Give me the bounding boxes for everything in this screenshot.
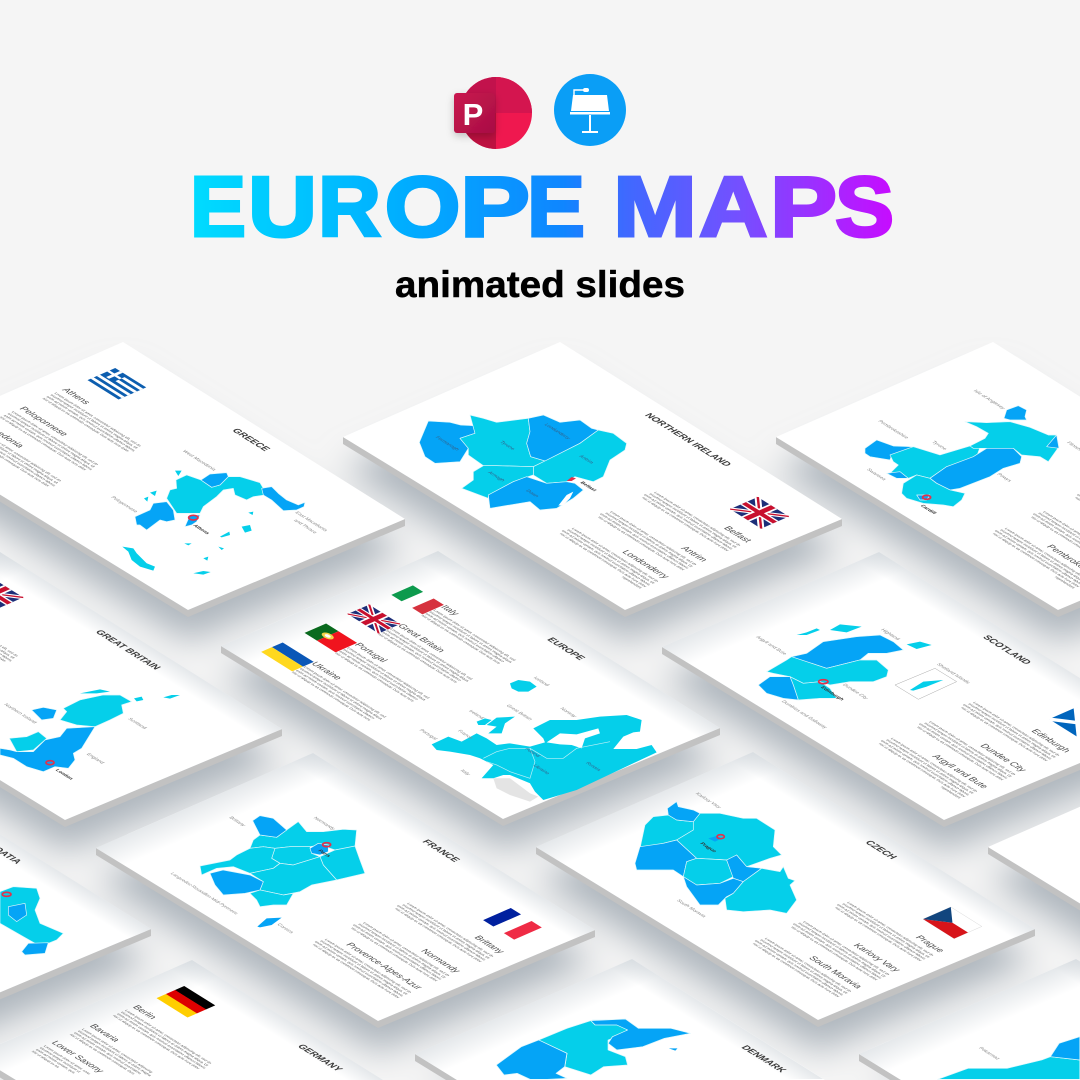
- Greece text content: enim ad minim veniam, quis nostrud exercitation ullamco laboris: [2, 414, 94, 471]
- Northern Ireland text content: enim ad minim veniam, quis nostrud exercitation ullamco laboris: [643, 494, 734, 550]
- Scotland text content: Argyll and Bute: [930, 753, 991, 790]
- Scotland map labels: Highland: [879, 628, 901, 641]
- Europe map labels: Great Britain: [504, 704, 534, 721]
- Greece map labels: Peloponnese: [109, 496, 139, 514]
- France text content: eiusmod tempor incididunt ut labore et dolore magna aliqua. Ut: [401, 904, 491, 959]
- Northern Ireland text content: eiusmod tempor incididunt ut labore et dolore magna aliqua. Ut: [604, 512, 694, 568]
- Europe text content: Italy: [439, 604, 462, 617]
- Scotland map labels: Edinburgh: [819, 686, 845, 701]
- slide shadows: [0, 374, 1080, 1080]
- France text content: eiusmod tempor incididunt ut labore et dolore magna aliqua. Ut: [357, 923, 447, 979]
- Greece text content: enim ad minim veniam, quis nostrud exercitation ullamco laboris: [45, 396, 136, 452]
- France text content: Normandy: [419, 948, 463, 974]
- Europe text content: enim ad minim veniam, quis nostrud exercitation ullamco: [424, 613, 505, 663]
- Northern Ireland map labels: Antrim: [577, 455, 595, 465]
- Northern Ireland text content: enim ad minim veniam, quis nostrud exercitation ullamco laboris: [599, 513, 690, 569]
- Denmark slide upper-right edge tint: [610, 959, 823, 1079]
- Germany text content: nisi ut aliquip ex ea commodo consequat. Duis aute irure dolor: [112, 1015, 201, 1070]
- Scotland text content: nisi ut aliquip ex ea commodo consequat. Duis aute irure dolor: [960, 707, 1049, 762]
- Europe text content: enim ad minim veniam, quis nostrud exercitation ullamco: [381, 631, 462, 682]
- Denmark slide upper-left edge tint: [415, 959, 660, 1072]
- Czech text content: eiusmod tempor incididunt ut labore et dolore magna aliqua. Ut: [759, 939, 848, 994]
- Germany text content: Bavaria: [87, 1023, 123, 1044]
- Europe text content: Lorem ipsum dolor sit amet, consectetur adipiscing elit, sed: [432, 609, 517, 661]
- Germany text content: Lorem ipsum dolor sit amet, consectetur adipiscing: [81, 1028, 154, 1073]
- Great Britain map labels: England: [84, 753, 106, 765]
- Northern Ireland map labels: Belfast: [578, 481, 598, 492]
- France text content: eiusmod tempor incididunt ut labore et dolore magna aliqua. Ut: [319, 940, 408, 995]
- Czech text content: nisi ut aliquip ex ea commodo consequat. Duis aute irure dolor: [834, 907, 923, 962]
- Northern Ireland text content: [478, 412, 814, 590]
- Germany text content: eiusmod tempor incididunt ut: [38, 1047, 82, 1073]
- title: P: [460, 160, 530, 255]
- Germany text content: eiusmod tempor incididunt ut labore et dolore magna: [77, 1030, 153, 1077]
- Greece map labels: East Macedonia: [293, 511, 329, 532]
- Scotland map labels: Dundee City: [841, 683, 870, 700]
- icon: PowerPoint logo: P: [463, 97, 483, 132]
- Europe map labels: [417, 676, 602, 776]
- map: Great Britain: [0, 689, 180, 772]
- Wales text content: nisi ut aliquip ex ea commodo consequat. Duis aute irure dolor: [992, 533, 1080, 588]
- France text content: enim ad minim veniam, quis nostrud exercitation ullamco laboris: [352, 924, 443, 980]
- Great Britain slide edge tint: [0, 552, 282, 824]
- Wales map labels: Isle of Anglesey: [971, 389, 1007, 410]
- France text content: Lorem ipsum dolor sit amet, consectetur adipiscing elit, sed do: [406, 902, 495, 958]
- Greece text content: Peloponnese: [17, 405, 71, 437]
- Germany text content: Lorem ipsum dolor sit amet, consectetur adipiscing elit, sed do: [124, 1009, 213, 1064]
- Greece map labels: and Thrace: [292, 519, 318, 535]
- Germany text content: nisi ut aliquip ex ea: [30, 1050, 61, 1069]
- Northern Ireland text content: Lorem ipsum dolor sit amet, consectetur adipiscing elit, sed do: [609, 511, 698, 566]
- Europe map labels: Poland: [523, 747, 541, 758]
- Northern Ireland map labels: [433, 423, 598, 498]
- France map labels: Brittany: [227, 816, 247, 828]
- France text content: Provence-Alpes-Azur: [344, 941, 425, 991]
- France map labels: Corsica: [275, 923, 295, 934]
- panel: Greece slide: [0, 342, 405, 617]
- France text content: Lorem ipsum dolor sit amet, consectetur adipiscing elit, sed do: [362, 922, 451, 977]
- Germany slide upper-right edge tint: [170, 960, 383, 1080]
- icon: Keynote logo: [554, 74, 626, 146]
- Northern Ireland text content: reprehenderit.: [621, 576, 643, 590]
- map: Denmark: [496, 1019, 691, 1079]
- Europe map labels: Italy: [458, 769, 472, 776]
- Northern Ireland text content: nisi ut aliquip ex ea commodo consequat. Duis aute irure dolor: [597, 516, 686, 571]
- France slide edge tint: [96, 753, 595, 1025]
- Europe text content: eiusmod tempor incididunt ut labore et dolore magna aliqua: [385, 630, 471, 683]
- Northern Ireland text content: Antrim: [679, 545, 710, 563]
- Wales map labels: Swansea: [864, 468, 888, 481]
- Europe text content: Lorem ipsum dolor sit amet, consectetur adipiscing elit, sed: [389, 628, 474, 680]
- Greece text content: Lorem ipsum dolor sit amet, consectetur adipiscing elit, sed do: [53, 392, 142, 447]
- Scotland map labels: Dumfries and Galloway: [779, 700, 829, 730]
- Germany slide upper-left edge tint: [0, 960, 220, 1073]
- bottom right slide upper-left edge tint: [859, 959, 1080, 1072]
- Great Britain map labels: Northern Ireland: [2, 703, 38, 724]
- Greece text content: nisi ut aliquip ex ea commodo consequat. Duis aute irure dolor: [41, 397, 131, 453]
- panel: Scotland slide: [662, 552, 1080, 827]
- panel: blank partial slide far right: [988, 752, 1080, 1027]
- icon: PowerPoint logo: [454, 77, 532, 149]
- map: Scotland: [758, 624, 957, 700]
- France text content: nisi ut aliquip ex ea commodo consequat. Duis aute irure dolor: [350, 927, 439, 982]
- Europe text content: nisi ut aliquip ex ea commodo consequat. Duis aute irure: [291, 671, 372, 721]
- Northern Ireland map labels: Down: [524, 489, 540, 498]
- Great Britain map labels: London: [53, 769, 74, 781]
- Europe text content: Lorem ipsum dolor sit amet, consectetur adipiscing elit, sed: [346, 647, 431, 699]
- Great Britain text content: [0, 570, 163, 706]
- Czech text content: Karlovy Vary: [851, 942, 903, 973]
- Northern Ireland text content: Lorem ipsum dolor sit amet, consectetur adipiscing elit, sed do: [571, 527, 659, 583]
- Wales map labels: Pembrokeshire: [876, 419, 910, 440]
- panel: Germany slide: [0, 960, 383, 1080]
- Czech text content: Lorem ipsum dolor sit amet, consectetur adipiscing elit, sed do: [764, 937, 852, 993]
- Scotland text content: nisi ut aliquip ex ea commodo consequat. Duis aute irure dolor: [878, 743, 967, 798]
- Europe text content: nisi ut aliquip ex ea commodo consequat. Duis aute irure: [334, 652, 415, 702]
- Europe map labels: Ireland: [467, 709, 485, 720]
- bottom right slide upper-right edge tint: [1054, 959, 1080, 1079]
- Scotland text content: SCOTLAND: [981, 634, 1034, 666]
- Scotland text content: eiusmod tempor incididunt ut labore et dolore magna aliqua. Ut: [923, 722, 1013, 778]
- title: U: [248, 160, 317, 255]
- title: A: [699, 160, 768, 255]
- Greece text content: Lorem ipsum dolor sit amet, consectetur adipiscing elit, sed do: [10, 411, 99, 466]
- title: E: [527, 160, 585, 255]
- map: Northern Ireland: [419, 415, 627, 510]
- title: S: [835, 160, 894, 255]
- Czech text content: Lorem ipsum dolor sit amet, consectetur adipiscing elit, sed do: [846, 901, 935, 957]
- Czech text content: [702, 839, 1007, 998]
- Europe map labels: Russia: [584, 761, 602, 772]
- Greece text content: nisi ut aliquip ex ea commodo consequat. Duis aute irure dolor: [0, 416, 88, 471]
- map: Croatia: [0, 887, 63, 955]
- title: M: [613, 160, 697, 255]
- Northern Ireland text content: Londonderry: [620, 549, 672, 580]
- Greece map labels: [109, 450, 329, 535]
- Europe text content: enim ad minim veniam, quis nostrud exercitation ullamco: [295, 669, 376, 720]
- Czech map labels: Prague: [698, 842, 718, 853]
- Germany text content: enim ad minim veniam, quis nostrud exercitation ullamco laboris: [116, 1013, 207, 1069]
- Wales text content: [938, 429, 1080, 590]
- Germany text content: Lorem ipsum dolor sit amet, cons: [42, 1045, 92, 1075]
- panel: France slide: [96, 753, 595, 1028]
- Great Britain map labels: Scotland: [126, 717, 148, 730]
- France text content: Lorem ipsum dolor sit amet, consectetur adipiscing elit, sed do: [324, 938, 412, 994]
- Scotland text content: Dundee City: [978, 743, 1029, 773]
- Germany text content: GERMANY: [295, 1043, 345, 1073]
- Northern Ireland text content: enim ad minim veniam, quis nostrud exercitation ullamco laboris: [560, 530, 652, 586]
- France text content: enim ad minim veniam, quis nostrud exercitation ullamco laboris: [396, 905, 487, 961]
- Greece text content: eiusmod tempor incididunt ut labore et dolore magna aliqua. Ut: [49, 394, 139, 449]
- map: bottom right slide: [938, 1037, 1080, 1079]
- Europe text content: Lorem ipsum dolor sit amet, consectetur adipiscing elit, sed: [303, 666, 387, 718]
- Northern Ireland text content: eiusmod tempor incididunt ut labore et dolore magna aliqua. Ut: [566, 529, 655, 584]
- panel: Denmark slide: [415, 959, 825, 1080]
- Europe text content: nisi ut aliquip ex ea commodo consequat. Duis aute irure: [377, 633, 458, 683]
- title: R: [318, 160, 381, 255]
- Europe text content: Great Britain: [396, 623, 447, 653]
- Czech text content: South Moravia: [807, 955, 866, 990]
- panel: Wales slide: [776, 342, 1080, 617]
- France map labels: Languedoc-Roussillon-Midi-Pyrenees: [169, 872, 240, 915]
- Czech map labels: South Moravia: [675, 899, 707, 918]
- France text content: nisi ut aliquip ex ea commodo consequat. Duis aute irure dolor: [312, 944, 401, 999]
- subtitle: animated slides: [395, 264, 685, 305]
- Scotland map labels: Shetland Islands: [935, 663, 972, 685]
- Czech map labels: [675, 792, 723, 918]
- Scotland map labels: [754, 628, 972, 730]
- Germany text content: nisi ut aliquip ex ea commodo consequat. Duis: [69, 1033, 136, 1075]
- France text content: FRANCE: [420, 838, 462, 863]
- Czech text content: enim ad minim veniam, quis nostrud exercitation ullamco laboris: [792, 923, 883, 979]
- Scotland text content: Lorem ipsum dolor sit amet, consectetur adipiscing elit, sed do: [972, 701, 1061, 757]
- Northern Ireland text content: nisi ut aliquip ex ea commodo consequat. Duis aute irure dolor: [641, 497, 730, 552]
- Croatia slide edge tint: [0, 752, 151, 938]
- panel: Czech slide: [536, 752, 1035, 1027]
- Scotland text content: enim ad minim veniam, quis nostrud exercitation ullamco laboris: [918, 723, 1009, 779]
- Wales text content: reprehenderit.: [1054, 576, 1076, 590]
- Northern Ireland text content: NORTHERN IRELAND: [642, 412, 734, 468]
- map: Greece: [122, 471, 305, 575]
- Czech map labels: Karlovy Vary: [693, 792, 723, 809]
- Scotland slide edge tint: [662, 552, 1080, 824]
- Europe text content: [259, 570, 587, 740]
- Wales map labels: Powys: [995, 472, 1013, 483]
- Europe text content: eiusmod tempor incididunt ut labore et dolore magna aliqua: [342, 649, 428, 702]
- Northern Ireland map labels: Armagh: [486, 471, 506, 483]
- France text content: enim ad minim veniam, quis nostrud exercitation ullamco laboris: [313, 941, 405, 997]
- Scotland text content: Lorem ipsum dolor sit amet, consectetur adipiscing elit, sed do: [890, 737, 978, 793]
- Europe text content: Ukraine: [309, 661, 344, 681]
- Germany text content: Lower Saxony: [49, 1040, 107, 1074]
- Denmark title: DENMARK: [739, 1044, 789, 1074]
- Great Britain text content: GREAT BRITAIN: [93, 629, 163, 671]
- title: O: [385, 160, 461, 255]
- Greece map labels: West Macedonia: [180, 450, 218, 472]
- panel: partial slide bottom right: [859, 959, 1080, 1080]
- Scotland text content: Lorem ipsum dolor sit amet, consectetur adipiscing elit, sed do: [928, 721, 1017, 776]
- Scotland map labels: Argyll and Bute: [754, 635, 788, 656]
- France map labels: Paris: [316, 849, 332, 858]
- panel: Europe slide: [221, 551, 720, 826]
- Europe map labels: Iceland: [531, 676, 551, 687]
- map: Europe: [432, 680, 657, 802]
- Europe map labels: Ukraine: [531, 764, 551, 775]
- Scotland text content: enim ad minim veniam, quis nostrud exercitation ullamco laboris: [879, 740, 971, 796]
- Wales map labels: Cardiff: [918, 504, 938, 515]
- Czech text content: nisi ut aliquip ex ea commodo consequat. Duis aute irure dolor: [790, 926, 879, 981]
- Great Britain map labels: [2, 703, 148, 781]
- Greece text content: GREECE: [230, 427, 272, 452]
- panel: Northern Ireland slide: [343, 342, 842, 617]
- France map labels: Normandy: [311, 816, 337, 831]
- Czech text content: eiusmod tempor incididunt ut labore et dolore magna aliqua. Ut: [841, 903, 931, 958]
- Scotland text content: enim ad minim veniam, quis nostrud exercitation ullamco laboris: [962, 704, 1053, 760]
- Europe text content: eiusmod tempor incididunt ut labore et dolore magna aliqua: [428, 611, 514, 664]
- Germany text content: [30, 986, 345, 1077]
- map: Czech Republic: [635, 802, 797, 913]
- Europe text content: Portugal: [352, 642, 390, 663]
- Northern Ireland map labels: Fermanagh: [433, 436, 461, 452]
- panel: Croatia slide: [0, 752, 151, 1027]
- Czech text content: eiusmod tempor incididunt ut labore et dolore magna aliqua. Ut: [797, 922, 887, 978]
- Europe map labels: Norway: [558, 707, 578, 719]
- Northern Ireland map labels: Londonderry: [542, 423, 572, 440]
- Czech text content: Lorem ipsum dolor sit amet, consectetur adipiscing elit, sed do: [802, 921, 891, 976]
- Czech text content: Prague: [913, 934, 947, 954]
- Greece text content: eiusmod tempor incididunt ut labore et dolore magna aliqua. Ut: [6, 412, 96, 468]
- Europe map labels: Portugal: [417, 728, 439, 741]
- Northern Ireland text content: Belfast: [722, 525, 754, 544]
- Germany text content: Berlin: [130, 1004, 159, 1020]
- Czech text content: nisi ut aliquip ex ea commodo consequat. Duis aute irure dolor: [752, 943, 841, 998]
- Scotland text content: eiusmod tempor incididunt ut labore et dolore magna aliqua. Ut: [967, 703, 1057, 758]
- Europe text content: EUROPE: [545, 636, 587, 661]
- Scotland text content: Edinburgh: [1029, 728, 1073, 754]
- Czech slide edge tint: [536, 752, 1035, 1024]
- bottom right slide label: Pokarmaz: [977, 1046, 1002, 1061]
- Europe slide edge tint: [221, 551, 720, 823]
- Northern Ireland text content: nisi ut aliquip ex ea commodo consequat. Duis aute irure dolor: [559, 533, 648, 588]
- Scotland text content: reprehenderit.: [940, 786, 962, 800]
- title: P: [770, 160, 837, 255]
- Germany text content: eiusmod tempor incididunt ut labore et dolore magna aliqua. Ut: [120, 1011, 209, 1067]
- Northern Ireland text content: eiusmod tempor incididunt ut labore et dolore magna aliqua. Ut: [648, 493, 738, 548]
- Wales map labels: [864, 389, 1080, 515]
- Europe text content: eiusmod tempor incididunt ut labore et dolore magna aliqua: [299, 668, 384, 721]
- Czech text content: CZECH: [863, 839, 899, 860]
- France text content: Brittany: [472, 934, 507, 955]
- Scotland text content: [816, 634, 1080, 800]
- title: E: [190, 160, 246, 255]
- Greece text content: [0, 360, 272, 522]
- Germany text content: enim ad minim veniam, quis: [34, 1048, 76, 1074]
- France text content: [260, 838, 567, 999]
- panel: Great Britain slide: [0, 552, 282, 827]
- France text content: nisi ut aliquip ex ea commodo consequat. Duis aute irure dolor: [394, 908, 483, 963]
- Wales map labels: Tyrone: [930, 440, 948, 451]
- Northern Ireland map labels: Tyrone: [498, 440, 516, 451]
- Europe text content: enim ad minim veniam, quis nostrud exercitation ullamco: [338, 650, 419, 701]
- Europe map labels: France: [456, 729, 474, 740]
- map: Wales: [865, 406, 1059, 507]
- Europe text content: nisi ut aliquip ex ea commodo consequat. Duis aute irure: [420, 614, 501, 665]
- Germany text content: enim ad minim veniam, quis nostrud exercitation: [73, 1032, 142, 1075]
- France map labels: [169, 816, 337, 934]
- Northern Ireland text content: Lorem ipsum dolor sit amet, consectetur adipiscing elit, sed do: [653, 491, 742, 547]
- map: France: [200, 816, 365, 927]
- Scotland text content: eiusmod tempor incididunt ut labore et dolore magna aliqua. Ut: [885, 739, 974, 794]
- Scotland text content: nisi ut aliquip ex ea commodo consequat. Duis aute irure dolor: [916, 726, 1005, 781]
- Czech text content: enim ad minim veniam, quis nostrud exercitation ullamco laboris: [753, 940, 845, 996]
- Czech text content: enim ad minim veniam, quis nostrud exercitation ullamco laboris: [836, 904, 927, 960]
- Greece map labels: Athens: [191, 524, 211, 535]
- Greece text content: Athens: [60, 387, 93, 406]
